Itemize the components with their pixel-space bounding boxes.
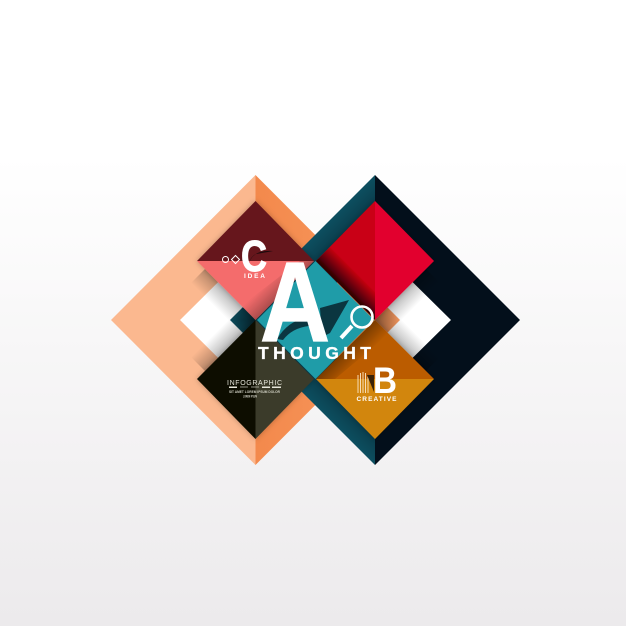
cast shadows on the openings <box>191 269 440 371</box>
letter C: C <box>241 232 267 281</box>
block: infographic text <box>227 380 282 398</box>
panel: B creative diamond <box>316 320 434 439</box>
panel: infographic dark diamond <box>197 320 314 439</box>
letter A long shadow <box>277 300 349 340</box>
white diamond openings <box>180 245 451 395</box>
body text lines: SIT AMET LOREM IPSUM DOLOR <box>229 390 280 394</box>
panel: C idea diamond <box>197 201 314 320</box>
icon: vertical bars <box>358 372 368 393</box>
left peach diamond frame <box>111 175 400 465</box>
letter A: A <box>260 239 330 365</box>
caption: INFOGRAPHIC: INFOGRAPHIC <box>227 380 282 387</box>
heading: THOUGHT: THOUGHT <box>258 343 371 363</box>
icon: magnifier <box>341 306 372 338</box>
panel: teal center diamond <box>257 261 374 379</box>
block: B creative label <box>356 360 397 403</box>
body text lines <box>229 390 280 398</box>
body text lines: LOREM IPSUM <box>243 394 257 398</box>
caption: CREATIVE: CREATIVE <box>356 396 397 403</box>
panel: red diamond <box>316 201 434 320</box>
dash row <box>229 386 281 388</box>
letter C brush shadow <box>249 251 273 263</box>
caption: IDEA: IDEA <box>244 273 265 280</box>
icon: circle and diamond <box>222 256 240 264</box>
letter B: B <box>373 360 397 401</box>
block: C idea label <box>222 232 273 281</box>
letter B shadow <box>367 375 374 392</box>
right navy diamond frame <box>230 175 520 465</box>
